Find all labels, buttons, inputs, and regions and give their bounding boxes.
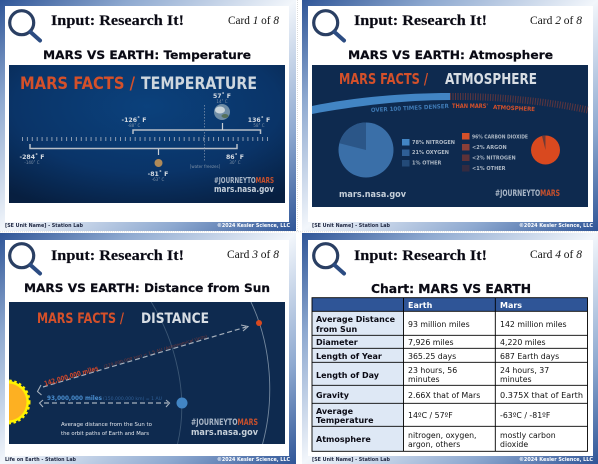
icon: magnifying glass (314, 244, 344, 274)
panel: card 4 comparison chart (302, 233, 598, 464)
table: mars vs earth: Temperature (316, 416, 374, 425)
icon: magnifying glass (10, 244, 40, 274)
icon: magnifying glass (314, 11, 344, 40)
chart: temperature range: -140˚ C (24, 160, 40, 165)
chart: temperature range: 58˚ C (253, 123, 265, 128)
chart: atmosphere comparison: #JOURNEYTOMARS (495, 189, 560, 199)
chart: atmosphere comparison (312, 65, 588, 207)
chart: temperature range: 136˚ F (248, 116, 270, 124)
chart: distance from sun: (150,000,000 km) = 1 AU (103, 396, 162, 401)
card number: Card 3 of 8 (227, 249, 279, 261)
icon: earth (176, 398, 188, 408)
chart: atmosphere comparison: 1% OTHER (412, 160, 441, 166)
chart: temperature range: 57˚ F (213, 92, 231, 100)
heading: input research it: Input: Research It! (51, 248, 184, 264)
panel: card 1 temperature (0, 0, 296, 231)
table: mars vs earth (312, 298, 588, 452)
title: MARS VS EARTH: Temperature (43, 48, 251, 62)
table: mars vs earth: Length of Year (316, 352, 382, 361)
heading: input research it: Input: Research It! (354, 13, 487, 29)
table: mars vs earth: 4,220 miles (500, 338, 546, 347)
heading: input research it: Input: Research It! (51, 13, 184, 29)
table: mars vs earth: from Sun (316, 325, 358, 334)
title: MARS VS EARTH: Atmosphere (348, 48, 553, 62)
icon: magnifying glass (10, 11, 40, 40)
chart: atmosphere comparison: OVER 100 TIMES DENSER (371, 104, 450, 114)
table: mars vs earth: -63ºC / -81ºF (500, 411, 551, 420)
chart: atmosphere comparison: 21% OXYGEN (412, 150, 449, 156)
chart: distance from sun: 142,000,000 miles (43, 364, 99, 388)
table: mars vs earth: Length of Day (316, 371, 380, 380)
title: MARS VS EARTH: Distance from Sun (24, 281, 270, 295)
chart: distance from sun (0, 300, 285, 446)
table: mars vs earth: Gravity (316, 391, 350, 400)
footer: [SE Unit Name] - Station Lab (312, 457, 390, 463)
table: mars vs earth: minutes (500, 375, 532, 384)
chart: distance from sun: 93,000,000 miles (47, 394, 102, 402)
chart: temperature range: -284˚ F (20, 153, 44, 161)
table: mars vs earth: Average (316, 407, 354, 416)
card number: Card 4 of 8 (530, 249, 582, 261)
footer: [SE Unit Name] - Station Lab (312, 223, 390, 229)
chart: distance from sun: the orbit paths of Earth and Mars (61, 431, 149, 437)
chart: temperature range: [water freezes] (190, 164, 221, 169)
table: mars vs earth: 23 hours, 56 (408, 366, 457, 375)
copyright: ©2024 Kesler Science, LLC (519, 223, 593, 229)
chart: atmosphere comparison: 96% CARBON DIOXIDE (472, 134, 529, 140)
icon: earth (214, 104, 230, 120)
table: mars vs earth: Diameter (316, 338, 358, 347)
chart: atmosphere comparison: <2% ARGON (472, 145, 507, 151)
chart: atmosphere comparison: 78% NITROGEN (412, 140, 455, 146)
panel: card 2 atmosphere (302, 0, 598, 231)
chart: atmosphere comparison: <2% NITROGEN (472, 156, 516, 162)
table: mars vs earth: 24 hours, 37 (500, 366, 549, 375)
card number: Card 2 of 8 (530, 15, 582, 27)
pie: mars atmosphere (531, 136, 560, 164)
table: mars vs earth: Earth (408, 301, 433, 310)
chart: temperature range: TEMPERATURE (141, 74, 257, 94)
icon: mars (154, 159, 162, 167)
chart: temperature range: mars.nasa.gov (214, 185, 274, 195)
chart: atmosphere comparison: THAN MARS' (452, 104, 488, 110)
table: mars vs earth: 687 Earth days (500, 352, 559, 361)
chart: temperature range: -126˚ F (122, 116, 146, 124)
chart: distance from sun: (229,000,000 km) = 1.5 AU (Astronomical Units) (103, 333, 208, 369)
table: mars vs earth: minutes (408, 375, 440, 384)
table: mars vs earth: dioxide (500, 440, 528, 449)
footer: Life on Earth - Station Lab (5, 457, 76, 463)
panel: card 3 distance (0, 233, 296, 464)
icon: mars (256, 320, 262, 326)
table: mars vs earth: 0.375X that of Earth (500, 391, 583, 400)
chart: temperature range: -63˚ C (152, 177, 164, 182)
chart: distance from sun: mars.nasa.gov (191, 428, 258, 438)
chart: distance from sun: DISTANCE (141, 311, 209, 327)
table: mars vs earth: Mars (500, 301, 522, 310)
chart: distance from sun: #JOURNEYTOMARS (191, 418, 258, 428)
pie: earth atmosphere (338, 122, 394, 178)
chart: atmosphere comparison: MARS FACTS / (339, 70, 428, 88)
table: mars vs earth: mostly carbon (500, 431, 556, 440)
heading: input research it: Input: Research It! (354, 248, 487, 264)
chart: temperature range: 86˚ F (226, 153, 244, 161)
chart: temperature range (9, 65, 285, 203)
chart: atmosphere comparison: mars.nasa.gov (339, 190, 406, 200)
table: mars vs earth: 14ºC / 57ºF (408, 411, 453, 420)
chart: atmosphere comparison: ATMOSPHERE (445, 70, 537, 88)
table: mars vs earth: 365.25 days (408, 352, 456, 361)
copyright: ©2024 Kesler Science, LLC (217, 457, 290, 463)
chart: temperature range: MARS FACTS / (20, 74, 136, 94)
card number: Card 1 of 8 (228, 15, 279, 27)
footer: [SE Unit Name] - Station Lab (5, 223, 83, 229)
chart: distance from sun: Average distance from the Sun to (61, 422, 152, 428)
chart: temperature range: -81˚ F (148, 170, 168, 178)
table: mars vs earth: 93 million miles (408, 320, 470, 329)
chart: atmosphere comparison: <1% OTHER (472, 166, 506, 172)
chart: temperature range: 14˚ C (216, 99, 228, 104)
table: mars vs earth: Average Distance (316, 315, 396, 324)
table: mars vs earth: 7,926 miles (408, 338, 454, 347)
table: mars vs earth: 2.66X that of Mars (408, 391, 480, 400)
table: mars vs earth: argon, others (408, 440, 460, 449)
title: Chart: MARS VS EARTH (371, 282, 531, 296)
table: mars vs earth: nitrogen, oxygen, (408, 431, 477, 440)
chart: temperature range: 30˚ C (229, 160, 241, 165)
copyright: ©2024 Kesler Science, LLC (519, 457, 593, 463)
chart: distance from sun: MARS FACTS / (37, 311, 125, 327)
chart: temperature range: -88˚ C (128, 123, 140, 128)
chart: temperature range: #JOURNEYTOMARS (214, 176, 274, 185)
chart: atmosphere comparison: ATMOSPHERE (493, 105, 535, 113)
table: mars vs earth: Atmosphere (316, 435, 371, 444)
copyright: ©2024 Kesler Science, LLC (217, 223, 290, 229)
icon: sun (9, 380, 30, 424)
table: mars vs earth: 142 million miles (500, 320, 567, 329)
